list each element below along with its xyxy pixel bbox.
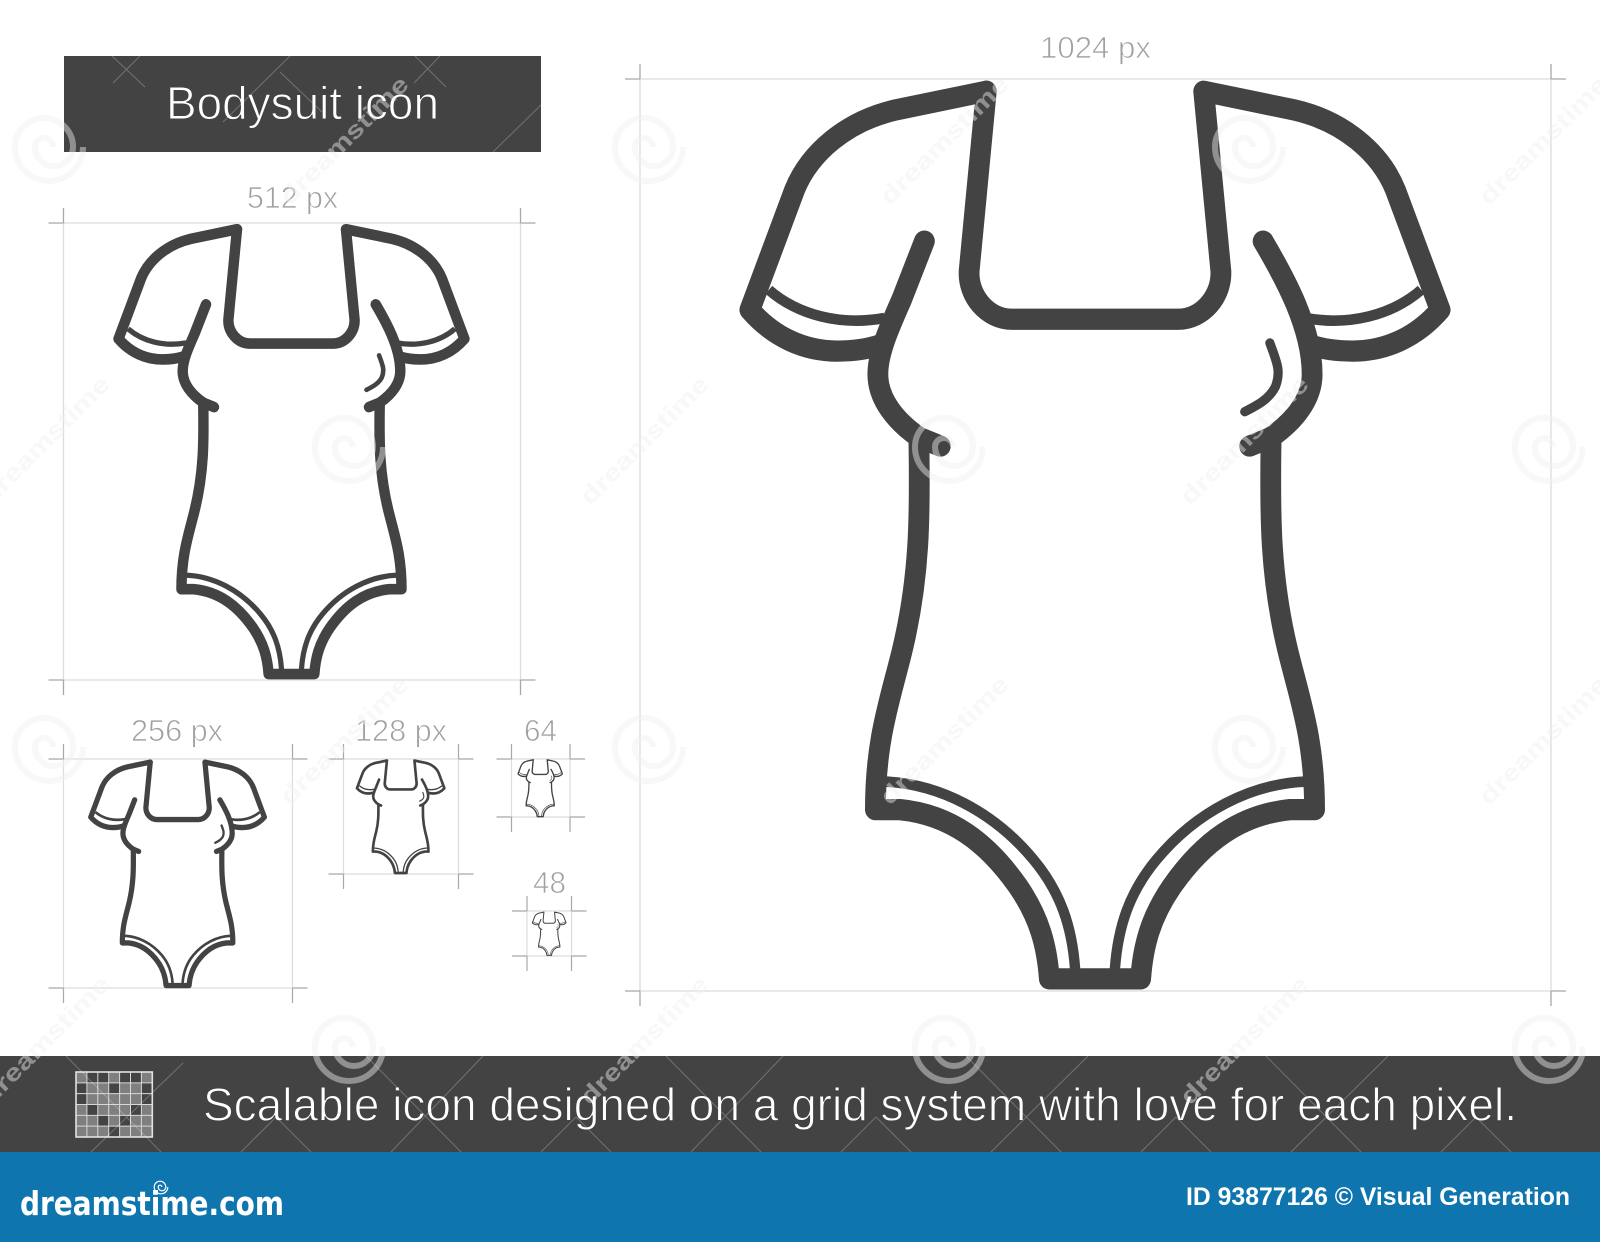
size frame 1024 [625, 64, 1566, 1006]
footer logo: dreamstime.com: dreamstime.com [20, 1184, 284, 1223]
watermark text: dreamstime [1175, 371, 1314, 510]
watermark text: dreamstime [875, 671, 1014, 810]
banner text: Scalable icon designed on a grid system with love for each pixel. [203, 1078, 1517, 1130]
label: 512 px: 512 px [247, 180, 338, 215]
icon: bodysuit 256 [91, 762, 264, 986]
label: 256 px: 256 px [131, 713, 223, 748]
size frame 48 [512, 896, 586, 971]
watermark text: dreamstime [275, 71, 414, 210]
title bar [64, 56, 541, 152]
grid system banner [0, 1056, 1600, 1152]
size frame 256 [48, 744, 308, 1003]
label: 48: 48 [533, 865, 566, 900]
icon: bodysuit 64 [518, 760, 562, 817]
label: 64: 64 [524, 713, 557, 748]
footer credit: ID 93877126 © Visual Generation [1186, 1183, 1570, 1211]
watermark lines on dark bars [66, 56, 1511, 1152]
size frame 64 [496, 744, 585, 832]
label: 128 px: 128 px [355, 713, 447, 748]
watermark text: dreamstime [875, 71, 1014, 210]
size frame 512 [48, 208, 536, 695]
label: 1024 px: 1024 px [1040, 30, 1151, 65]
footer bar [0, 1152, 1600, 1242]
watermark text: dreamstime [1175, 971, 1314, 1110]
watermark text: dreamstime [275, 671, 414, 810]
watermark text: dreamstime [1474, 671, 1600, 810]
icon: bodysuit 48 [532, 912, 566, 955]
icon: pixel grid [76, 1072, 152, 1137]
size frame 128 [328, 744, 474, 889]
watermark spirals [15, 118, 1583, 1081]
watermark text: dreamstime [575, 371, 714, 510]
icon: bodysuit 128 [357, 761, 444, 873]
watermark text: dreamstime [575, 971, 714, 1110]
watermark text: dreamstime [1474, 71, 1600, 210]
icon: bodysuit 1024 [750, 91, 1440, 979]
title bar: Bodysuit icon [166, 77, 439, 129]
icon: bodysuit 512 [119, 229, 464, 674]
